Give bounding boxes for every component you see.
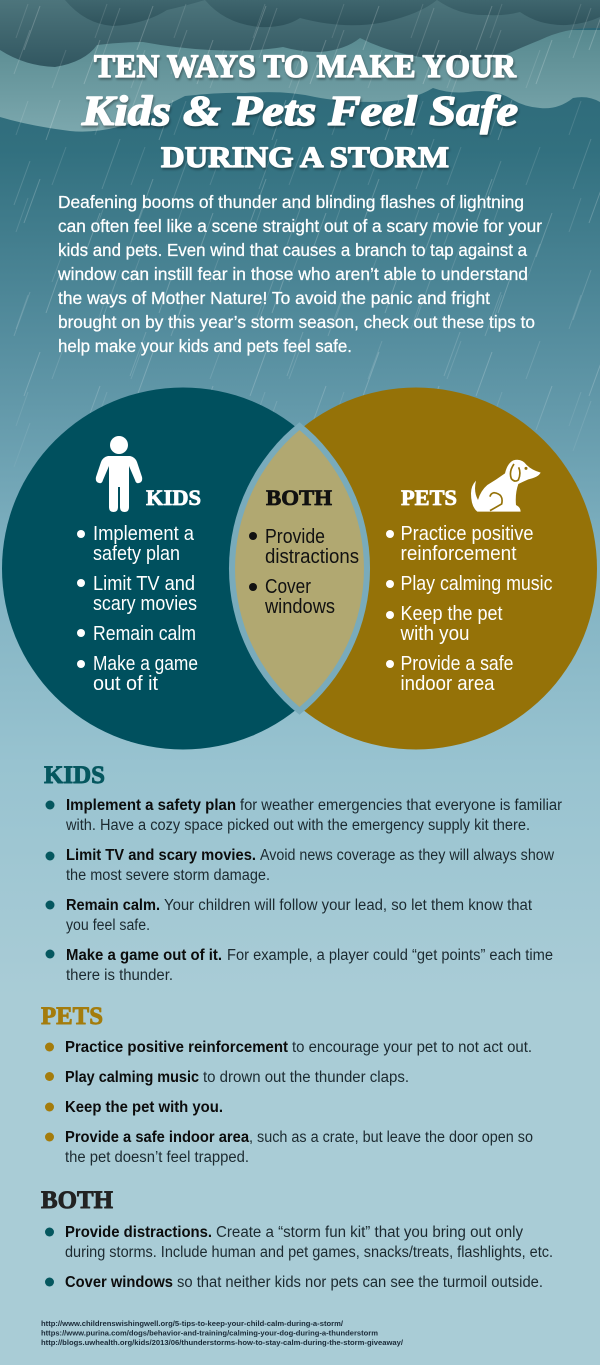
kids bullets	[46, 800, 54, 958]
section: kids	[44, 762, 562, 984]
source links: https://www.purina.com/dogs/behavior-and-training/calming-your-dog-during-a-thunderstorm	[41, 1328, 378, 1338]
pets text: to drown out the thunder claps.	[203, 1069, 409, 1086]
kids list: Make a game	[93, 653, 198, 675]
both heading: BOTH	[266, 485, 332, 510]
kids list: scary movies	[93, 593, 197, 615]
both text: during storms. Include human and pet games, snacks/treats, flashlights, etc.	[65, 1244, 553, 1261]
section: both	[41, 1187, 553, 1291]
venn diagram	[2, 388, 597, 750]
kids heading: KIDS	[146, 485, 201, 510]
intro paragraph: help make your kids and pets feel safe.	[58, 336, 352, 356]
icon: dog	[471, 460, 541, 512]
section: pets	[41, 1003, 533, 1166]
lens: both	[235, 430, 364, 707]
kids list: safety plan	[93, 543, 180, 565]
title: TEN WAYS TO MAKE YOUR	[94, 49, 517, 85]
title	[81, 49, 518, 174]
kids text: For example, a player could “get points” each time	[227, 947, 553, 964]
kids text: Implement a safety plan	[66, 797, 236, 814]
pets list: Practice positive	[400, 523, 534, 545]
both text: so that neither kids nor pets can see the turmoil outside.	[177, 1274, 543, 1291]
kids text: Your children will follow your lead, so let them know that	[164, 897, 533, 914]
kids text: Remain calm.	[66, 897, 160, 914]
both text: Cover windows	[65, 1274, 173, 1291]
both list: distractions	[265, 546, 359, 568]
pets text: Provide a safe indoor area	[65, 1129, 249, 1146]
pets heading: PETS	[401, 485, 457, 510]
source links	[41, 1319, 403, 1347]
pets text: Practice positive reinforcement	[65, 1039, 288, 1056]
both list	[249, 526, 359, 618]
pets bullets	[45, 1042, 54, 1142]
pets text: Keep the pet with you.	[65, 1099, 223, 1116]
kids text: there is thunder.	[66, 967, 173, 984]
circle: pets	[235, 388, 597, 750]
kids text: Make a game out of it.	[66, 947, 222, 964]
kids text: Avoid news coverage as they will always show	[260, 847, 555, 864]
heading: both: BOTH	[41, 1187, 114, 1214]
source links: http://www.childrenswishingwell.org/5-tips-to-keep-your-child-calm-during-a-storm/	[41, 1319, 343, 1328]
pets list: with you	[400, 623, 470, 645]
kids text: Limit TV and scary movies.	[66, 847, 256, 864]
pets text: , such as a crate, but leave the door open so	[249, 1129, 533, 1146]
both text: Create a “storm fun kit” that you bring out only	[216, 1224, 523, 1241]
both text: Provide distractions.	[65, 1224, 212, 1241]
pets list: indoor area	[400, 673, 495, 695]
kids list: Implement a	[93, 523, 195, 545]
title: DURING A STORM	[161, 141, 449, 174]
kids list	[77, 523, 198, 695]
rain	[14, 4, 600, 460]
circle: kids	[2, 388, 364, 750]
both bullets	[45, 1228, 54, 1286]
pets list: Play calming music	[400, 573, 552, 595]
both list: Cover	[265, 576, 311, 598]
kids text: with. Have a cozy space picked out with the emergency supply kit there.	[65, 817, 530, 834]
kids list: Remain calm	[93, 623, 196, 645]
intro paragraph: kids and pets. Even wind that causes a branch to tap against a	[58, 240, 527, 260]
storm clouds	[0, 0, 600, 132]
pets list: reinforcement	[400, 543, 517, 565]
pets list: Keep the pet	[400, 603, 503, 625]
icon: child	[96, 436, 142, 512]
pets text: the pet doesn’t feel trapped.	[65, 1149, 249, 1166]
kids list: Limit TV and	[93, 573, 195, 595]
kids list: out of it	[93, 673, 158, 695]
pets text: to encourage your pet to not act out.	[292, 1039, 532, 1056]
title: Kids & Pets Feel Safe	[81, 89, 518, 135]
pets text	[65, 1039, 533, 1166]
pets list	[386, 523, 552, 695]
intro paragraph: can often feel like a scene straight out of a scary movie for your	[58, 216, 542, 236]
intro paragraph: Deafening booms of thunder and blinding flashes of lightning	[58, 192, 524, 212]
both list: Provide	[265, 526, 325, 548]
heading: kids: KIDS	[44, 762, 105, 789]
intro paragraph: brought on by this year’s storm season, check out these tips to	[58, 312, 535, 332]
both text	[65, 1224, 553, 1291]
intro paragraph	[57, 192, 542, 356]
kids text	[65, 797, 562, 984]
heading: pets: PETS	[41, 1003, 103, 1030]
intro paragraph: window can instill fear in those who aren’t able to understand	[57, 264, 528, 284]
kids text: for weather emergencies that everyone is familiar	[240, 797, 562, 814]
kids text: the most severe storm damage.	[66, 867, 270, 884]
both list: windows	[264, 596, 335, 618]
intro paragraph: the ways of Mother Nature! To avoid the panic and fright	[58, 288, 490, 308]
pets text: Play calming music	[65, 1069, 199, 1086]
kids text: you feel safe.	[66, 917, 150, 934]
pets list: Provide a safe	[400, 653, 514, 675]
lens gap	[229, 422, 370, 715]
source links: http://blogs.uwhealth.org/kids/2013/06/thunderstorms-how-to-stay-calm-during-the-storm-giveaway/	[41, 1338, 403, 1347]
